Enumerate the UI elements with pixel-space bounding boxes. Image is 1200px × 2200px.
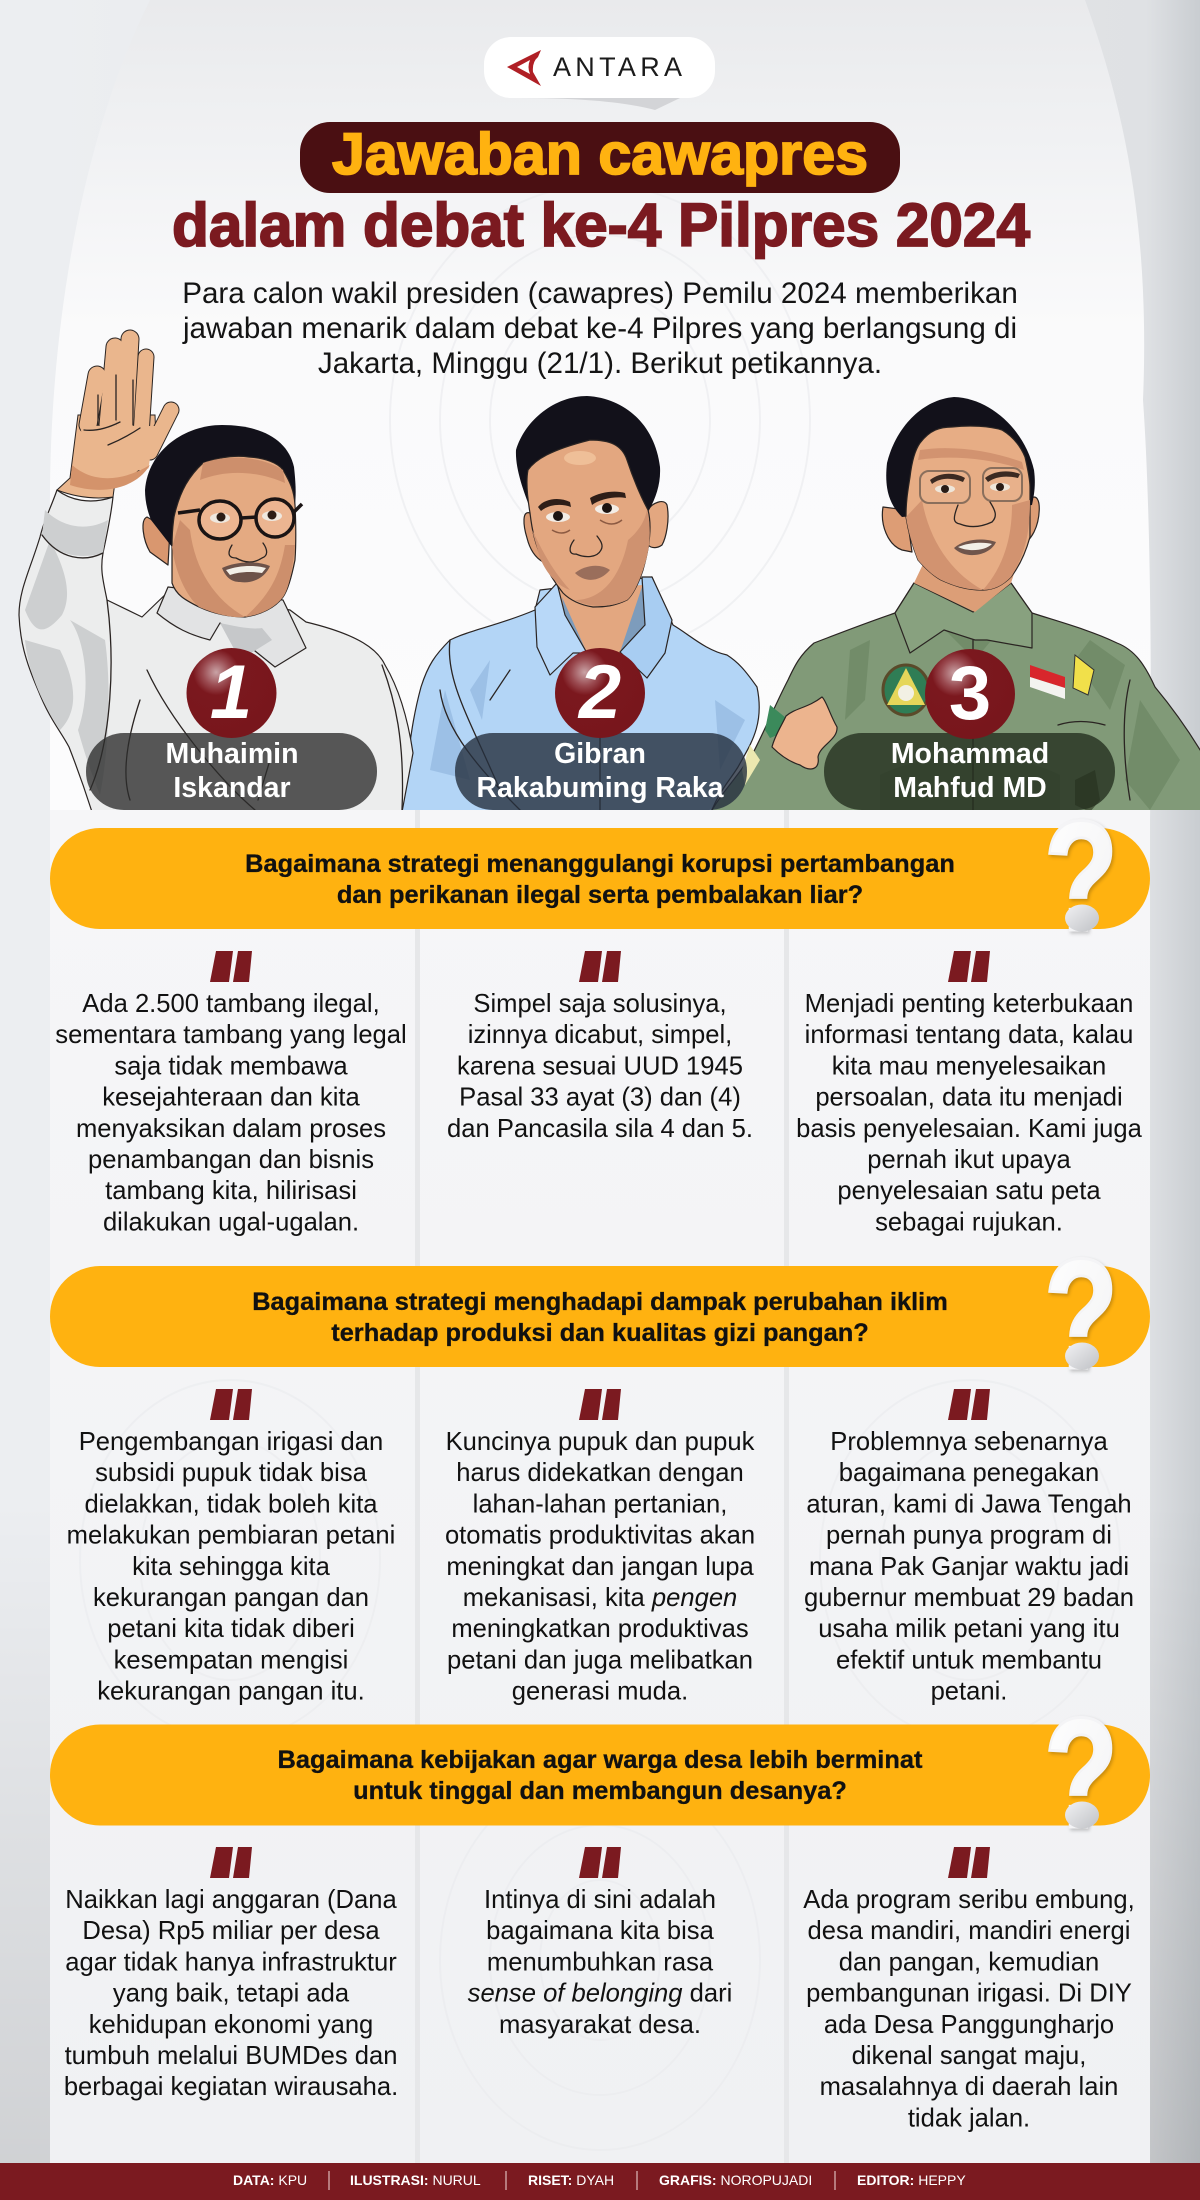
answer: Muhaimin: kita sehingga kita (132, 1553, 331, 1581)
badge: green emblem (883, 665, 929, 715)
answer: Gibran: meningkat dan jangan lupa (446, 1553, 754, 1581)
number badge 2: 2 (577, 650, 621, 735)
answer: Muhaimin: melakukan pembiaran petani (67, 1522, 395, 1550)
answer: Muhaimin: penambangan dan bisnis (88, 1146, 374, 1174)
logo: ANTARA (484, 37, 715, 110)
answer: Muhaimin: saja tidak membawa (114, 1052, 348, 1080)
answer: Mahfud: mana Pak Ganjar waktu jadi (809, 1553, 1129, 1581)
section 3 answers (64, 1847, 1135, 2132)
title pill: Jawaban cawapres: Jawaban cawapres (332, 122, 868, 187)
answer: Muhaimin: kekurangan pangan itu. (97, 1678, 365, 1706)
number badge 1: 1 (210, 650, 252, 735)
hand (57, 339, 171, 498)
answer: Muhaimin: kehidupan ekonomi yang (89, 2011, 373, 2039)
answer: Mahfud: efektif untuk membantu (836, 1646, 1102, 1674)
number badge 2 (555, 648, 645, 738)
label: Mohammad Mahfud MD: Mohammad (891, 738, 1049, 770)
section 2 answers (67, 1389, 1134, 1706)
answer: Gibran: bagaimana kita bisa (486, 1917, 715, 1945)
badge: flag (1030, 665, 1065, 699)
answer: Gibran: Kuncinya pupuk dan pupuk (446, 1428, 755, 1456)
answer: Mahfud: tidak jalan. (908, 2104, 1030, 2132)
answer: Gibran: generasi muda. (512, 1678, 688, 1706)
answer: Mahfud: bagaimana penegakan (839, 1459, 1099, 1487)
answer: Muhaimin: Desa) Rp5 miliar per desa (82, 1917, 380, 1945)
section 1 question pill (50, 788, 1150, 964)
section 1 question pill: dan perikanan ilegal serta pembalakan liar? (337, 881, 863, 909)
answer: Muhaimin: subsidi pupuk tidak bisa (95, 1459, 368, 1487)
answer: Mahfud: Ada program seribu embung, (803, 1886, 1135, 1914)
number badge 3 (925, 649, 1015, 739)
footer credits bar (0, 2163, 1200, 2200)
footer credits bar: RISET: DYAH (528, 2172, 614, 2188)
quote mark (210, 1389, 252, 1420)
label: Mohammad Mahfud MD (824, 733, 1115, 810)
section 3 question pill (50, 1685, 1150, 1861)
answer: Gibran: Simpel saja solusinya, (473, 990, 727, 1018)
icon: question mark: ? (1044, 1226, 1118, 1402)
answer: Muhaimin: kesempatan mengisi (114, 1646, 348, 1674)
section 2 question pill: Bagaimana strategi menghadapi dampak perubahan iklim (252, 1288, 948, 1316)
answer: Gibran: menumbuhkan rasa (487, 1948, 714, 1976)
answer: Gibran: otomatis produktivitas akan (445, 1522, 755, 1550)
answer: Mahfud: petani. (931, 1678, 1007, 1706)
answer: Mahfud: aturan, kami di Jawa Tengah (806, 1490, 1132, 1518)
answer: Mahfud: masalahnya di daerah lain (820, 2073, 1118, 2101)
answer: Mahfud: kita mau menyelesaikan (832, 1052, 1106, 1080)
answer: Muhaimin: tumbuh melalui BUMDes dan (65, 2042, 397, 2070)
answer: Mahfud: ada Desa Panggungharjo (824, 2011, 1114, 2039)
label: Mohammad Mahfud MD: Mahfud MD (893, 772, 1047, 804)
answer: Muhaimin: menyaksikan dalam proses (76, 1115, 386, 1143)
footer credits bar: ILUSTRASI: NURUL (350, 2172, 481, 2188)
answer: Gibran: izinnya dicabut, simpel, (468, 1021, 732, 1049)
section 2 question pill: terhadap produksi dan kualitas gizi pangan? (331, 1319, 869, 1347)
figure: Muhaimin (19, 339, 413, 812)
answer: Mahfud: basis penyelesaian. Kami juga (796, 1115, 1143, 1143)
answer: Muhaimin: kekurangan pangan dan (93, 1584, 369, 1612)
answer: Muhaimin: yang baik, tetapi ada (113, 1980, 350, 2008)
section 3 question pill: untuk tinggal dan membangun desanya? (353, 1777, 847, 1805)
answer: Gibran: Intinya di sini adalah (484, 1886, 716, 1914)
answer: Mahfud: usaha milik petani yang itu (818, 1615, 1120, 1643)
answer: Gibran: lahan-lahan pertanian, (473, 1490, 727, 1518)
quote mark (579, 1389, 621, 1420)
answer: Gibran: sense of belonging dari (468, 1980, 732, 2008)
section 3 question pill: Bagaimana kebijakan agar warga desa lebih berminat (278, 1746, 923, 1774)
logo: ANTARA: ANTARA (553, 52, 682, 82)
label: Gibran Rakabuming Raka (455, 733, 747, 810)
answer: Gibran: dan Pancasila sila 4 dan 5. (447, 1115, 753, 1143)
answer: Muhaimin: kesejahteraan dan kita (102, 1084, 361, 1112)
intro paragraph: Para calon wakil presiden (cawapres) Pemilu 2024 memberikan (182, 277, 1018, 310)
answer: Muhaimin: tambang kita, hilirisasi (105, 1177, 357, 1205)
answer: Muhaimin: Naikkan lagi anggaran (Dana (65, 1886, 398, 1914)
answer: Mahfud: dikenal sangat maju, (852, 2042, 1086, 2070)
answer: Mahfud: dan pangan, kemudian (839, 1948, 1099, 1976)
answer: Mahfud: persoalan, data itu menjadi (815, 1084, 1123, 1112)
label: Muhaimin Iskandar (86, 733, 377, 810)
answer: Gibran: karena sesuai UUD 1945 (457, 1052, 743, 1080)
answer: Mahfud: Problemnya sebenarnya (830, 1428, 1108, 1456)
title line 2: dalam debat ke-4 Pilpres 2024 (172, 191, 1030, 259)
intro paragraph: jawaban menarik dalam debat ke-4 Pilpres yang berlangsung di (182, 312, 1017, 345)
answer: Mahfud: gubernur membuat 29 badan (804, 1584, 1134, 1612)
answer: Muhaimin: petani kita tidak diberi (107, 1615, 355, 1643)
footer credits bar: EDITOR: HEPPY (857, 2172, 966, 2188)
quote mark (579, 1847, 621, 1878)
number badge 3: 3 (949, 651, 991, 736)
answer: Gibran: Pasal 33 ayat (3) dan (4) (459, 1084, 741, 1112)
answer: Mahfud: informasi tentang data, kalau (805, 1021, 1133, 1049)
footer credits bar: GRAFIS: NOROPUJADI (659, 2172, 812, 2188)
answer: Mahfud: Menjadi penting keterbukaan (805, 990, 1133, 1018)
answer: Mahfud: sebagai rujukan. (875, 1208, 1063, 1236)
quote mark (948, 951, 990, 982)
label: Gibran Rakabuming Raka: Rakabuming Raka (476, 772, 725, 804)
answer: Gibran: petani dan juga melibatkan (447, 1646, 753, 1674)
section 2 question pill (50, 1226, 1150, 1402)
figure: Gibran (375, 396, 759, 812)
footer credits bar: DATA: KPU (233, 2172, 307, 2188)
quote mark (210, 1847, 252, 1878)
icon: question mark: ? (1044, 1685, 1118, 1861)
answer: Muhaimin: agar tidak hanya infrastruktur (65, 1948, 397, 1976)
section 1 question pill: Bagaimana strategi menanggulangi korupsi pertambangan (245, 850, 955, 878)
answer: Gibran: masyarakat desa. (499, 2011, 701, 2039)
answer: Muhaimin: berbagai kegiatan wirausaha. (64, 2073, 398, 2101)
answer: Mahfud: desa mandiri, mandiri energi (808, 1917, 1130, 1945)
icon: question mark: ? (1044, 788, 1118, 964)
quote mark (210, 951, 252, 982)
number badge 1 (186, 648, 276, 738)
answer: Mahfud: pernah punya program di (826, 1522, 1112, 1550)
answer: Muhaimin: sementara tambang yang legal (55, 1021, 407, 1049)
section 1 answers (55, 951, 1143, 1236)
answer: Mahfud: penyelesaian satu peta (837, 1177, 1101, 1205)
answer: Mahfud: pembangunan irigasi. Di DIY (806, 1980, 1132, 2008)
answer: Gibran: meningkatkan produktivas (451, 1615, 749, 1643)
answer: Muhaimin: dielakkan, tidak boleh kita (84, 1490, 378, 1518)
intro paragraph: Jakarta, Minggu (21/1). Berikut petikannya. (318, 347, 882, 380)
quote mark (579, 951, 621, 982)
badge: yellow tag (1073, 655, 1094, 695)
figure: Mahfud (711, 397, 1200, 812)
quote mark (948, 1389, 990, 1420)
answer: Mahfud: pernah ikut upaya (867, 1146, 1071, 1174)
answer: Muhaimin: dilakukan ugal-ugalan. (103, 1208, 359, 1236)
answer: Gibran: mekanisasi, kita pengen (463, 1584, 737, 1612)
label: Gibran Rakabuming Raka: Gibran (554, 738, 646, 770)
answer: Gibran: harus didekatkan dengan (456, 1459, 744, 1487)
label: Muhaimin Iskandar: Iskandar (173, 772, 291, 804)
quote mark (948, 1847, 990, 1878)
label: Muhaimin Iskandar: Muhaimin (166, 738, 298, 770)
candidate illustrations (19, 339, 1200, 812)
answer: Muhaimin: Ada 2.500 tambang ilegal, (82, 990, 380, 1018)
answer: Muhaimin: Pengembangan irigasi dan (79, 1428, 383, 1456)
